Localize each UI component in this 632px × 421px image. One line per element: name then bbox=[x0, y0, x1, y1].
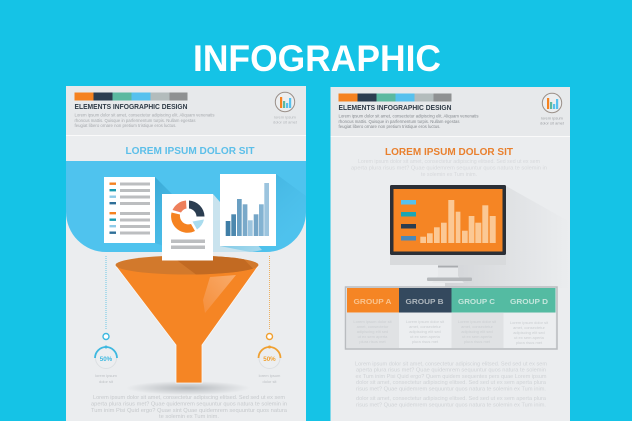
document: bar chart bbox=[220, 174, 276, 246]
group D: GROUP D bbox=[510, 297, 549, 306]
column bodies: amet, consectetur bbox=[461, 324, 494, 329]
column bodies: plura risus met bbox=[464, 339, 491, 344]
intro text bbox=[351, 159, 547, 178]
heading: left page: LOREM IPSUM DOLOR SIT bbox=[126, 145, 255, 157]
icon caption bbox=[540, 116, 565, 126]
header text: feugiat libero ornare non pretium tristique eros luctus. bbox=[74, 123, 176, 128]
column bodies: Lorem ipsum dolor sit bbox=[406, 319, 445, 324]
column bodies: Lorem ipsum dolor sit bbox=[458, 319, 497, 324]
intro text: aperta plura risus met? Quae quidemrem sequuntur quos natura te solemin in bbox=[351, 166, 547, 172]
group C bbox=[452, 288, 504, 312]
monitor bbox=[390, 185, 506, 283]
panel: funnel page bbox=[66, 86, 306, 421]
body text: right page: risus met? Quae quidemrem sequuntur quos natura te solemin ex Tum inim. bbox=[356, 402, 546, 408]
left connector and gauge: dolor sit bbox=[99, 379, 114, 384]
body text: left page: aperta plura risus met? Quae quidemrem sequuntur quos natura te solemin in bbox=[91, 402, 287, 408]
blue rounded banner bbox=[66, 161, 306, 252]
right connector and gauge: lorem ipsum bbox=[259, 373, 281, 378]
group A bbox=[347, 288, 399, 312]
icon caption: dolor sit amet bbox=[273, 120, 298, 124]
header text: rhoncus mattis. Quisque in parfermentum turpis. Nullam egestas bbox=[74, 118, 196, 123]
table bbox=[346, 287, 557, 349]
group B bbox=[399, 288, 452, 312]
column bodies: ut ex sem aperta bbox=[514, 335, 545, 340]
funnel shadow bbox=[126, 381, 250, 395]
intro text: Lorem ipsum dolor sit amet, consectetur adipiscing elitsed. Sed sed ut ex sem bbox=[358, 159, 540, 165]
panel: monitor page bbox=[330, 87, 570, 421]
column bodies: amet, consectetur bbox=[513, 325, 546, 330]
column bodies: Lorem ipsum dolor sit bbox=[510, 320, 549, 325]
right connector and gauge bbox=[258, 256, 281, 384]
body text: right page: aperta plura risus met? Quae quidemrem sequuntur quos natura te solemin bbox=[356, 368, 546, 374]
header text: Lorem ipsum dolor sit amet, consectetur adipiscing elit. Aliquam venenatis bbox=[338, 114, 479, 118]
body text: right page: Lorem ipsum dolor sit amet, consectetur adipiscing elitsed. Sed sed ut ex sem bbox=[355, 362, 547, 368]
right connector and gauge: dolor sit bbox=[262, 379, 277, 384]
column bodies: adipiscing elit sed bbox=[409, 329, 441, 334]
header: right page bbox=[330, 87, 570, 137]
icon caption: lorem ipsum bbox=[541, 116, 564, 120]
column bodies: ut ex sem aperta bbox=[410, 334, 441, 339]
header: left page bbox=[66, 86, 306, 136]
document: donut chart bbox=[162, 194, 213, 260]
right connector and gauge: 50% bbox=[263, 356, 276, 363]
body text: left page bbox=[91, 395, 287, 420]
group A: GROUP A bbox=[354, 297, 392, 306]
screen legend bbox=[401, 200, 416, 240]
icon caption bbox=[273, 114, 298, 124]
column bodies: Lorem ipsum dolor sit bbox=[353, 319, 392, 324]
body text: right page: ex Tum inim Pisi Quid ergo? Quem quidem sequentes pers quae Lorem ipsum bbox=[356, 374, 546, 380]
document: list bbox=[104, 177, 155, 243]
column bodies bbox=[347, 313, 556, 348]
group D bbox=[504, 288, 556, 312]
column bodies: amet, consectetur bbox=[357, 324, 389, 329]
body text: right page bbox=[355, 362, 547, 408]
colour swatches bbox=[74, 92, 188, 100]
body text: left page: te solemin ex Tum inim. bbox=[159, 414, 219, 420]
body text: right page: dolor sit amet, consectetur adipiscing elitsed. Sed sed ut ex sem aperta plura bbox=[356, 396, 546, 402]
icon: bar chart badge bbox=[542, 93, 562, 113]
icon caption: lorem ipsum bbox=[274, 114, 297, 120]
header heading: ELEMENTS INFOGRAPHIC DESIGN bbox=[338, 103, 452, 112]
column bodies: ut ex sem aperta bbox=[358, 334, 388, 339]
left connector and gauge: 50% bbox=[100, 356, 113, 363]
body text: right page: dolor sit amet, consectetur adipiscing elitsed. Sed sed ut ex sem aperta plura bbox=[356, 380, 546, 386]
column bodies: adipiscing elit sed bbox=[357, 329, 388, 334]
body text: left page: Tum inim Pisi Quid ergo? Quae sint Quae quidemrem sequuntur quos natura bbox=[91, 408, 287, 414]
group C: GROUP C bbox=[458, 297, 496, 306]
icon: bar chart badge bbox=[275, 92, 295, 112]
left connector and gauge bbox=[95, 256, 118, 384]
heading: right page: LOREM IPSUM DOLOR SIT bbox=[385, 146, 514, 158]
header text: rhoncus mattis. Quisque in parfermentum turpis. Nullam egestas bbox=[338, 119, 460, 124]
colour swatches bbox=[338, 94, 452, 102]
header text: feugiat libero ornare non pretium tristique eros luctus. bbox=[338, 124, 440, 129]
intro text: te solemin ex Tum inim. bbox=[421, 172, 477, 178]
funnel bbox=[115, 255, 260, 383]
document shadows bbox=[155, 174, 306, 252]
header text: Lorem ipsum dolor sit amet, consectetur adipiscing elit. Aliquam venenatis bbox=[74, 112, 215, 118]
column bodies: adipiscing elit sed bbox=[461, 329, 493, 334]
screen bar chart bbox=[420, 200, 496, 243]
body text: right page: risus met? Quae quidemrem sequuntur quos natura te solemin ex Tum inim. bbox=[356, 386, 546, 392]
monitor long shadow bbox=[445, 186, 570, 288]
column bodies: adipiscing elit sed bbox=[513, 330, 545, 335]
body text: left page: Lorem ipsum dolor sit amet, consectetur adipiscing elitsed. Sed sed ut ex sem bbox=[93, 395, 285, 401]
column bodies: plura risus met bbox=[516, 340, 543, 345]
column bodies: ut ex sem aperta bbox=[462, 334, 493, 339]
group B: GROUP B bbox=[406, 297, 444, 306]
header heading: ELEMENTS INFOGRAPHIC DESIGN bbox=[74, 102, 188, 111]
left connector and gauge: lorem ipsum bbox=[95, 373, 118, 378]
column bodies: plura risus met bbox=[412, 339, 439, 344]
header text bbox=[74, 112, 215, 128]
header text bbox=[338, 114, 479, 129]
column bodies: amet, consectetur bbox=[409, 324, 442, 329]
column bodies: plura risus met bbox=[359, 339, 387, 344]
icon caption: dolor sit amet bbox=[540, 120, 565, 126]
title: INFOGRAPHIC bbox=[193, 38, 441, 79]
